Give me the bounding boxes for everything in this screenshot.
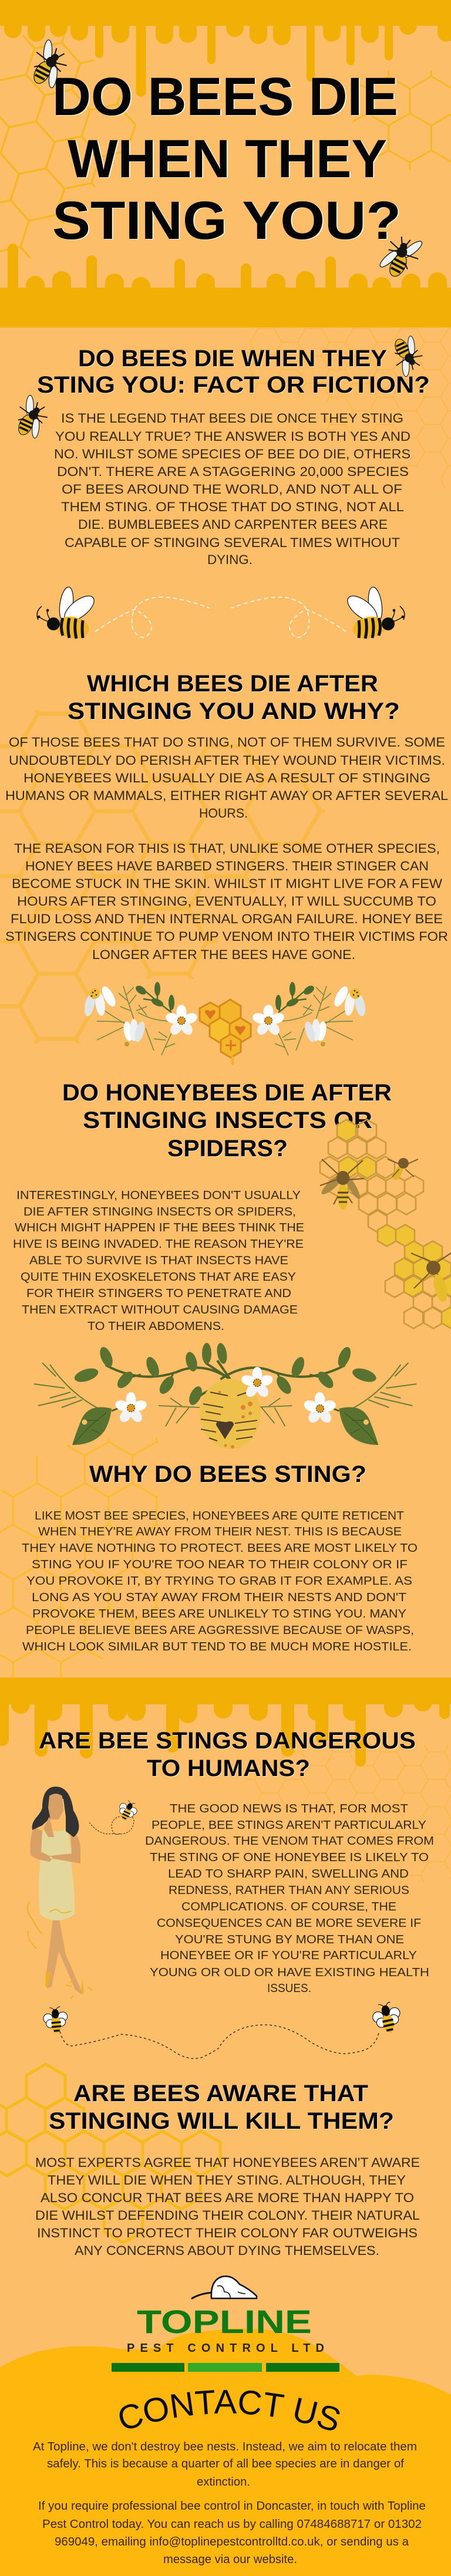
body text: UNDOUBTEDLY DO PERISH AFTER THEY WOUND THEIR VICTIMS.	[9, 753, 445, 768]
body text: HONEYBEE OR IF YOU'RE PARTICULARLY	[160, 1949, 417, 1962]
body text: YOUNG OR OLD OR HAVE EXISTING HEALTH	[150, 1966, 429, 1979]
heading: ARE BEE STINGS DANGEROUS	[39, 1728, 416, 1754]
body text: STING YOU IF YOU'RE TOO NEAR TO THEIR COLONY OR IF	[32, 1558, 408, 1571]
body text: CONSEQUENCES CAN BE MORE SEVERE IF	[157, 1917, 421, 1930]
body text: THE REASON FOR THIS IS THAT, UNLIKE SOME OTHER SPECIES,	[14, 841, 440, 856]
honeycomb with bees illustration	[319, 1120, 451, 1329]
body text: THEY HAVE NOTHING TO PROTECT. BEES ARE MOST LIKELY TO	[22, 1542, 418, 1555]
honeycomb background	[250, 328, 451, 487]
body text: THEN EXTRACT WITHOUT CAUSING DAMAGE	[22, 1304, 298, 1316]
body text: YOU REALLY TRUE? THE ANSWER IS BOTH YES AND	[55, 429, 410, 444]
panel: why do bees sting	[0, 1437, 418, 1679]
logo: Topline Pest Control: TOPLINE	[137, 2303, 312, 2340]
panel: are stings dangerous	[0, 1677, 451, 2058]
body text: LONG AS YOU STAY AWAY FROM THEIR NESTS AND DON'T	[32, 1591, 406, 1604]
title: DO BEES DIE	[52, 67, 398, 127]
contact body text: Pest Control today. You can reach us by calling 07484688717 or 01302	[42, 2518, 422, 2531]
body text: HIVE IS BEING INVADED. THE REASON THEY'RE	[13, 1238, 304, 1251]
body text: LEAD TO SHARP PAIN, SWELLING AND	[168, 1868, 409, 1880]
illustration: worried woman	[28, 1787, 93, 1999]
body text: CAPABLE OF STINGING SEVERAL TIMES WITHOUT	[65, 535, 400, 550]
icon: cute bee left	[37, 586, 98, 641]
heading	[37, 346, 430, 398]
body text: DIE AFTER STINGING INSECTS OR SPIDERS,	[23, 1206, 296, 1218]
body text: HUMANS OR MAMMALS, EITHER RIGHT AWAY OR AFTER SEVERAL	[5, 788, 448, 803]
body text: OF THOSE BEES THAT DO STING, NOT OF THEM SURVIVE. SOME	[9, 735, 445, 749]
heading: contact us: CONTACT US	[120, 2390, 339, 2430]
heading: WHICH BEES DIE AFTER	[87, 671, 378, 697]
contact body text: message via our website.	[163, 2553, 297, 2566]
contact body text: If you require professional bee control in Doncaster, in touch with Topline	[38, 2500, 426, 2513]
icon: bee left	[9, 392, 54, 441]
body text: DIE WHILST DEFENDING THEIR COLONY. THEIR NATURAL	[35, 2208, 420, 2223]
body text: LIKE MOST BEE SPECIES, HONEYBEES ARE QUITE RETICENT	[35, 1510, 404, 1522]
body text	[5, 735, 448, 962]
heading: DO BEES DIE WHEN THEY	[78, 346, 387, 372]
body text: INTERESTINGLY, HONEYBEES DON'T USUALLY	[16, 1189, 301, 1202]
body text	[22, 1510, 418, 1653]
body text: THE GOOD NEWS IS THAT, FOR MOST	[170, 1802, 408, 1815]
contact body text	[33, 2440, 426, 2566]
body text: STINGERS CONTINUE TO PUMP VENOM INTO THEIR VICTIMS FOR	[5, 929, 448, 944]
honeycomb left	[0, 35, 138, 258]
body text: FLUID LOSS AND THEN INTERNAL ORGAN FAILURE. HONEY BEE	[11, 911, 443, 926]
yellow cloud background	[0, 2329, 451, 2576]
body text: FOR THEIR STINGERS TO PENETRATE AND	[26, 1287, 291, 1300]
contact body text: safely. This is because a quarter of all bee species are in danger of	[47, 2457, 404, 2470]
body text: WHICH LOOK SIMILAR BUT TEND TO BE MUCH MORE HOSTILE.	[22, 1640, 412, 1653]
icon: dashed flight path left	[95, 597, 210, 637]
heading: TO HUMANS?	[147, 1755, 310, 1781]
honeycomb background	[0, 2064, 220, 2243]
title: STING YOU?	[52, 191, 401, 251]
body text: THEY WILL DIE WHEN THEY STING. ALTHOUGH, THEY	[48, 2173, 406, 2187]
honey drips band	[0, 1677, 451, 1761]
honeycomb right	[352, 70, 451, 170]
body text	[35, 2155, 420, 2258]
heading: ARE BEES AWARE THAT	[73, 2081, 368, 2106]
heading: WHY DO BEES STING?	[89, 1461, 366, 1487]
icon: small bee and dashed path	[89, 1798, 140, 1834]
heading: DO HONEYBEES DIE AFTER	[62, 1080, 392, 1106]
icon: dashed flight path right	[231, 597, 346, 637]
contact body text: At Topline, we don't destroy bee nests. Instead, we aim to relocate them	[33, 2440, 417, 2453]
body text: QUITE THIN EXOSKELETONS THAT ARE EASY	[21, 1271, 296, 1284]
body text: NO. WHILST SOME SPECIES OF BEE DO DIE, OTHERS	[54, 447, 410, 461]
body text: PROVOKE THEM, BEES ARE UNLIKELY TO STING YOU. MANY	[32, 1608, 406, 1620]
icon: dashed path with two bees	[42, 2001, 403, 2058]
body text: DYING.	[207, 552, 253, 567]
body text	[13, 1189, 304, 1333]
icon: bee right	[386, 333, 429, 380]
body text: MOST EXPERTS AGREE THAT HONEYBEES AREN'T AWARE	[35, 2155, 420, 2170]
panel: are bees aware	[0, 2064, 420, 2258]
logo: Topline Pest Control	[112, 2276, 339, 2372]
honeycomb background	[0, 710, 325, 1044]
body text: ISSUES.	[267, 1982, 311, 1995]
heading	[68, 671, 400, 724]
body text: THEM STING. OF THOSE THAT DO STING, NOT ALL	[61, 499, 404, 514]
panel: fact or fiction	[9, 328, 451, 641]
body text: BECOME STUCK IN THE SKIN. WHILST IT MIGHT LIVE FOR A FEW	[12, 876, 442, 891]
body text: DANGEROUS. THE VENOM THAT COMES FROM	[145, 1835, 434, 1848]
body text: PEOPLE, BEE STINGS AREN'T PARTICULARLY	[152, 1819, 426, 1832]
body text: INSTINCT TO PROTECT THEIR COLONY FAR OUTWEIGHS	[37, 2226, 418, 2240]
body text: COMPLICATIONS. OF COURSE, THE	[181, 1900, 396, 1913]
body text: WHICH MIGHT HAPPEN IF THE BEES THINK THE	[15, 1221, 304, 1234]
honeycomb background	[0, 1437, 159, 1679]
icon: cute bee right	[344, 586, 405, 641]
body text: THE STING OF ONE HONEYBEE IS LIKELY TO	[150, 1851, 429, 1864]
body text: DIE. BUMBLEBEES AND CARPENTER BEES ARE	[78, 517, 388, 532]
heading	[39, 1728, 416, 1781]
honey drips bottom	[0, 249, 451, 328]
icon: bee top left	[24, 36, 75, 92]
panel: hero header	[0, 0, 451, 328]
body text: WHEN THEY'RE AWAY FROM THEIR NEST. THIS IS BECAUSE	[38, 1525, 402, 1538]
panel: contact footer	[0, 2275, 451, 2576]
body text: YOU'RE STUNG BY MORE THAN ONE	[175, 1933, 404, 1946]
floral honeycomb wreath	[83, 982, 367, 1064]
heading: STINGING WILL KILL THEM?	[49, 2108, 394, 2134]
honeycomb background	[247, 1745, 451, 1884]
body text	[54, 411, 410, 567]
body text: ANY CONCERNS ABOUT DYING THEMSELVES.	[75, 2243, 379, 2258]
body text: HONEY BEES HAVE BARBED STINGERS. THEIR STINGER CAN	[25, 859, 429, 873]
heading: STINGING YOU AND WHY?	[68, 698, 400, 724]
body text	[145, 1802, 434, 1995]
body text: HOURS.	[199, 806, 248, 821]
body text: YOU PROVOKE IT, BY TRYING TO GRAB IT FOR EXAMPLE. AS	[26, 1575, 412, 1588]
body text: IS THE LEGEND THAT BEES DIE ONCE THEY STING	[61, 411, 403, 426]
heading: STING YOU: FACT OR FICTION?	[37, 372, 430, 398]
title: WHEN THEY	[68, 129, 387, 189]
body text: PEOPLE BELIEVE BEES ARE AGGRESSIVE BECAUSE OF WASPS,	[26, 1624, 414, 1637]
icon: bee bottom right	[376, 227, 427, 283]
panel: which bees die	[0, 671, 448, 1064]
body text: HONEYBEES WILL USUALLY DIE AS A RESULT OF STINGING	[23, 771, 430, 785]
contact body text: extinction.	[197, 2476, 250, 2489]
body text: OF BEES AROUND THE WORLD, AND NOT ALL OF	[62, 482, 402, 497]
contact body text: 969049, emailing info@toplinepestcontrolltd.co.uk, or sending us a	[55, 2536, 409, 2548]
heading: STINGING INSECTS OR	[83, 1108, 372, 1133]
body text: ABLE TO SURVIVE IS THAT INSECTS HAVE	[29, 1254, 288, 1267]
body text: REDNESS, RATHER THAN ANY SERIOUS	[169, 1884, 409, 1897]
honey drips top	[0, 0, 451, 92]
logo: Topline Pest Control: PEST CONTROL LTD	[127, 2342, 324, 2355]
body text: DON'T. THERE ARE A STAGGERING 20,000 SPECIES	[57, 464, 409, 479]
title	[52, 67, 401, 251]
body text: ALSO CONCUR THAT BEES ARE MORE THAN HAPPY TO	[41, 2190, 414, 2205]
body text: LONGER AFTER THE BEES HAVE GONE.	[92, 947, 355, 962]
body text: TO THEIR ABDOMENS.	[87, 1320, 224, 1333]
panel: honeybees and insects	[13, 1080, 451, 1449]
heading: SPIDERS?	[167, 1136, 288, 1162]
heading	[49, 2081, 394, 2134]
body text: HOURS AFTER STINGING, EVENTUALLY, IT WILL SUCCUMB TO	[17, 894, 436, 909]
heading	[62, 1080, 392, 1162]
hive and leaves wreath	[34, 1342, 416, 1449]
